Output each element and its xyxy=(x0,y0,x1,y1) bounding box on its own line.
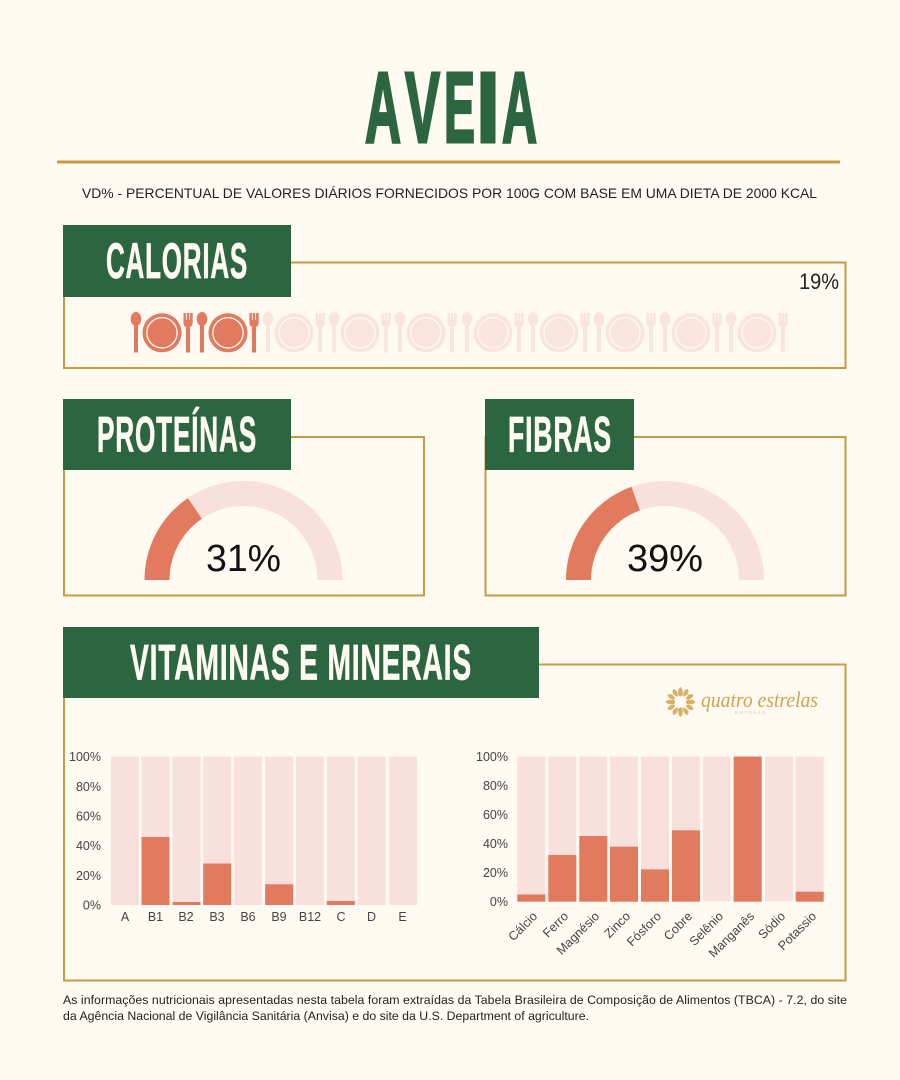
x axis labels: Zinco xyxy=(602,909,633,941)
gauge: 39%: 39% xyxy=(627,538,703,580)
x axis labels: Selênio xyxy=(687,909,726,949)
title: V xyxy=(405,52,440,164)
title: E xyxy=(444,52,475,164)
y axis labels: 80% xyxy=(76,780,101,794)
heading: fibras: FIBRAS xyxy=(508,406,612,462)
title xyxy=(365,52,537,164)
x axis labels: Manganês xyxy=(706,909,757,960)
x axis labels: A xyxy=(121,910,130,924)
heading: vitaminas e minerais: VITAMINAS E MINERAIS xyxy=(130,634,472,690)
x axis labels: B12 xyxy=(299,910,321,924)
x axis labels xyxy=(506,909,819,960)
footer note: As informações nutricionais apresentadas nesta tabela foram extraídas da Tabela Brasileira de Composição de Alimentos (TBCA) - 7.2, do site xyxy=(63,993,847,1007)
heading: calorias: CALORIAS xyxy=(106,233,248,289)
panel: vitaminas e minerais xyxy=(63,627,846,980)
panel: proteinas xyxy=(63,399,424,596)
logo: quatro estrelas: ENTOAJO xyxy=(735,710,767,715)
y axis labels: 0% xyxy=(490,895,508,909)
heading: vitaminas e minerais xyxy=(63,627,539,698)
x axis labels: Magnésio xyxy=(554,909,602,957)
logo: quatro estrelas: quatro estrelas xyxy=(701,687,818,712)
heading: proteinas: PROTEÍNAS xyxy=(97,406,257,462)
y axis labels: 0% xyxy=(83,898,101,912)
x axis labels: B3 xyxy=(209,910,225,924)
gauge: 39% xyxy=(566,481,764,580)
x axis labels: B9 xyxy=(271,910,287,924)
x axis labels: Cobre xyxy=(661,909,695,943)
x axis labels: C xyxy=(336,910,346,924)
panel: fibras xyxy=(485,399,846,596)
x axis labels: Potassio xyxy=(775,909,819,953)
y axis labels: 40% xyxy=(483,837,508,851)
panel: calorias xyxy=(63,225,846,368)
heading: fibras xyxy=(485,399,634,470)
y axis labels: 40% xyxy=(76,839,101,853)
title: I xyxy=(476,52,500,164)
x axis labels: E xyxy=(398,910,407,924)
footer note: da Agência Nacional de Vigilância Sanitária (Anvisa) e do site da U.S. Department of agriculture. xyxy=(63,1009,589,1023)
chart value bars xyxy=(517,756,824,902)
x axis labels: Ferro xyxy=(540,909,571,940)
y axis labels: 80% xyxy=(483,779,508,793)
y axis labels: 60% xyxy=(483,808,508,822)
title: A xyxy=(365,52,401,164)
x axis labels: Cálcio xyxy=(506,909,540,944)
x axis labels: B1 xyxy=(148,910,163,924)
logo: quatro estrelas xyxy=(666,687,818,717)
chart: minerais xyxy=(476,750,824,960)
calorias value: 19% xyxy=(799,269,839,294)
y axis labels: 20% xyxy=(76,869,101,883)
y axis labels: 100% xyxy=(476,750,508,764)
chart: vitaminas xyxy=(69,750,417,924)
y axis labels xyxy=(69,750,101,912)
heading: calorias xyxy=(63,225,291,297)
x axis labels: B2 xyxy=(178,910,194,924)
x axis labels: B6 xyxy=(240,910,256,924)
x axis labels xyxy=(121,910,407,924)
gauge: 31% xyxy=(144,481,342,580)
y axis labels: 100% xyxy=(69,750,101,764)
y axis labels xyxy=(476,750,508,909)
gauge: 31%: 31% xyxy=(206,538,281,580)
footer note xyxy=(63,993,847,1023)
x axis labels: Sódio xyxy=(756,909,788,942)
y axis labels: 20% xyxy=(483,866,508,880)
x axis labels: Fósforo xyxy=(624,909,664,949)
subtitle: VD% - PERCENTUAL DE VALORES DIÁRIOS FORNECIDOS POR 100G COM BASE EM UMA DIETA DE 2000 KCAL xyxy=(82,185,817,201)
x axis labels: D xyxy=(367,910,376,924)
icon row: plates and cutlery xyxy=(131,312,788,352)
y axis labels: 60% xyxy=(76,810,101,824)
text: A xyxy=(502,52,537,164)
chart background bars xyxy=(111,756,417,905)
heading: proteinas xyxy=(63,399,291,470)
chart background bars xyxy=(517,756,824,902)
chart value bars xyxy=(142,837,355,905)
